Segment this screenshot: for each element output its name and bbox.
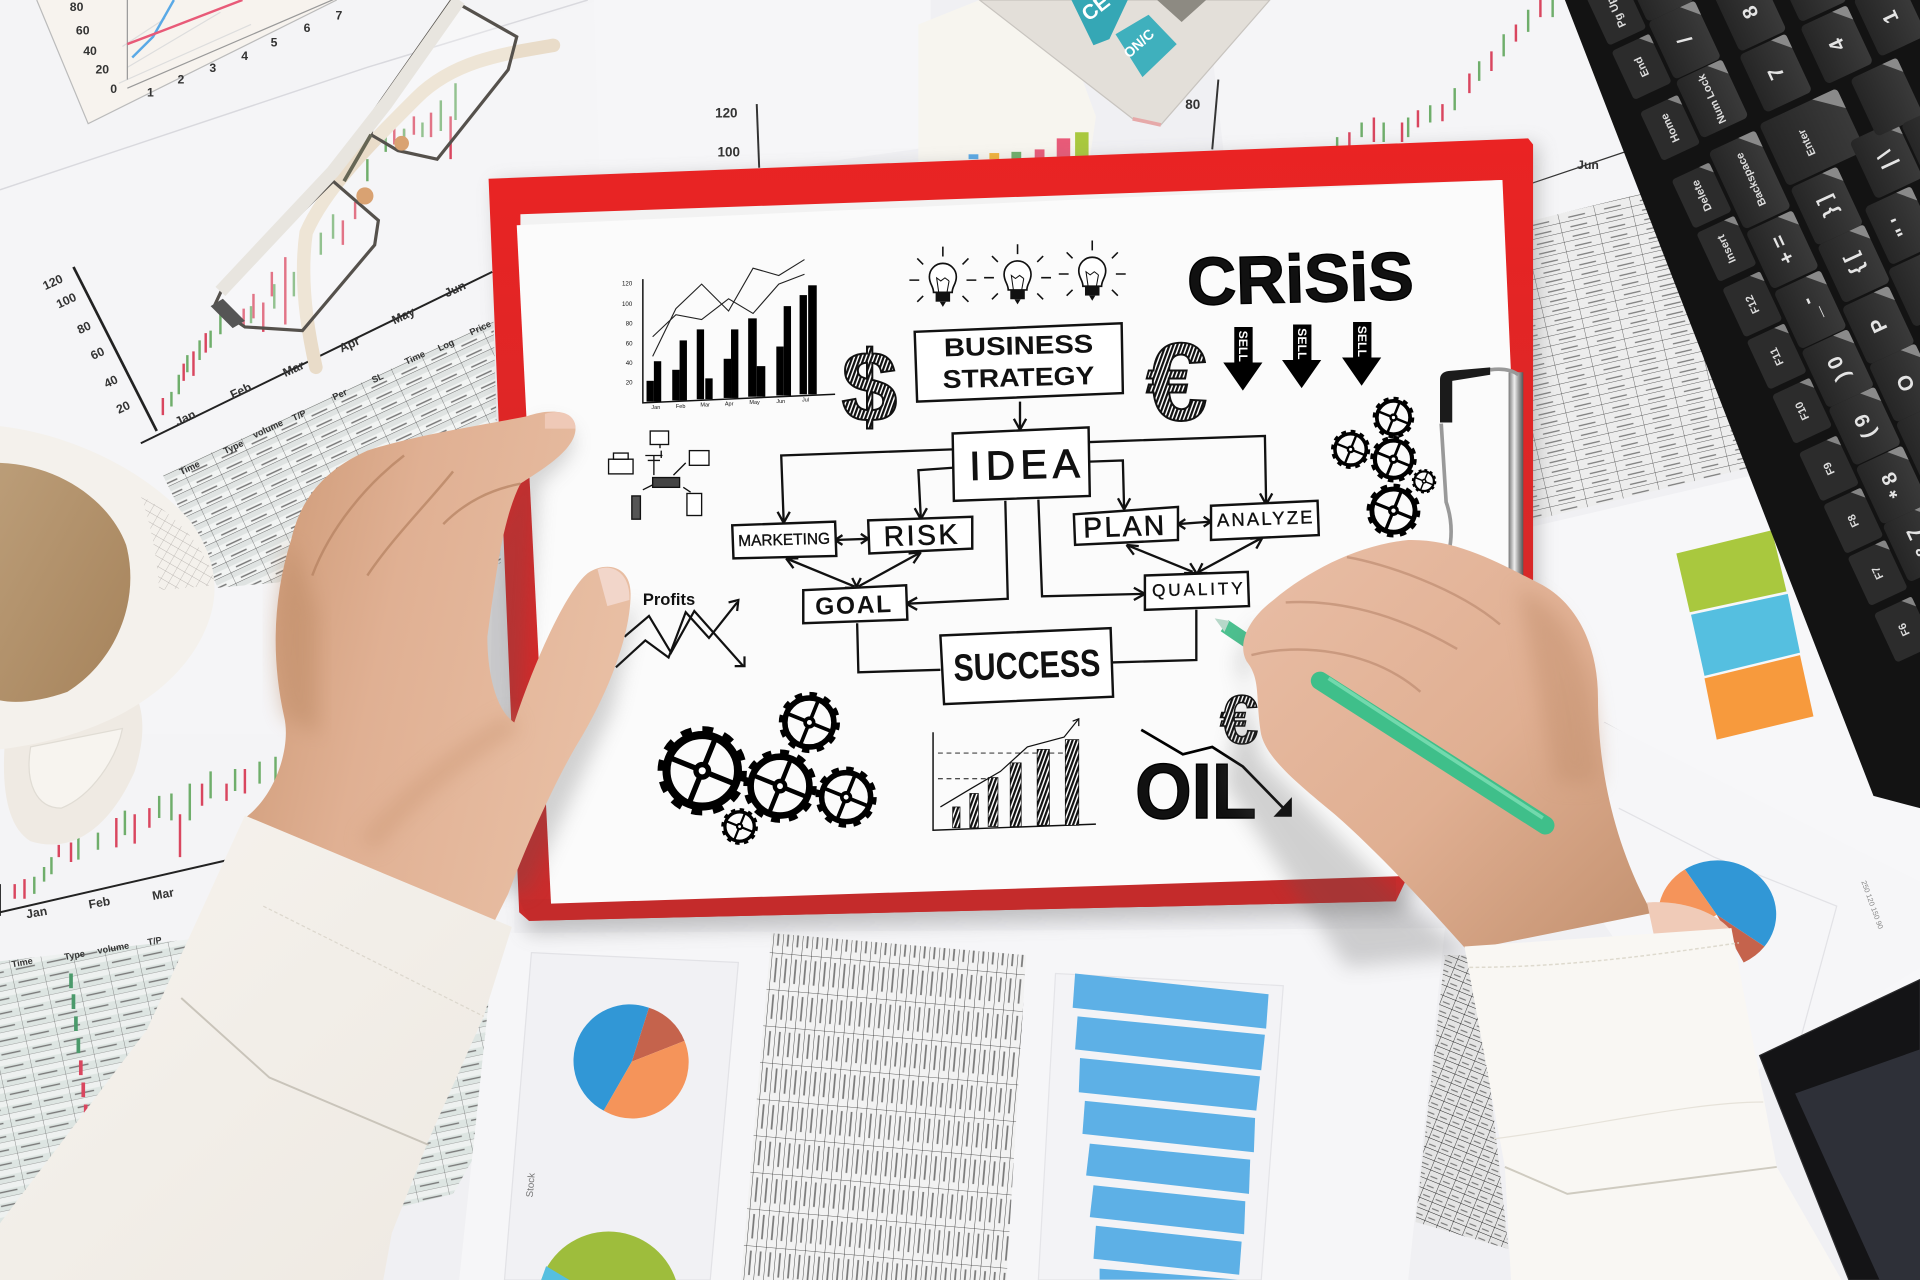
bottom table behind sleeve — [1416, 955, 1509, 1249]
paper: big candlestick sheet: 20 — [114, 398, 133, 417]
main key rows: _ - — [1795, 294, 1827, 326]
paper: top right candlestick: Jun — [1577, 158, 1599, 172]
box: idea — [953, 427, 1090, 501]
paper: top-left line chart: 1 — [147, 86, 154, 100]
data table upper left: Type — [222, 438, 245, 456]
main key rows: * 8 — [1877, 468, 1909, 501]
diagram: hand-drawn bar chart: May — [749, 400, 760, 406]
main key rows: { [ — [1840, 249, 1869, 278]
data table upper left: SL — [370, 371, 385, 385]
paper: top-left line chart: 20 — [96, 62, 109, 76]
right sleeve — [1464, 928, 1842, 1280]
main key rows: " ' — [1887, 211, 1916, 240]
box: risk — [868, 517, 972, 553]
main key rows: P — [1866, 314, 1892, 336]
data table upper left — [163, 319, 501, 588]
box: analyze: ANALYZE — [1217, 506, 1313, 531]
diagram: hand-drawn bar chart: Feb — [676, 404, 685, 410]
pie chart right — [1658, 860, 1776, 962]
data table lower left: volume — [97, 940, 130, 956]
box: idea: IDEA — [969, 440, 1080, 489]
box: business strategy — [915, 323, 1123, 402]
data table lower left: Time — [11, 956, 34, 969]
main key rows: O — [1892, 371, 1920, 395]
left sleeve — [0, 816, 512, 1280]
right hand — [1243, 540, 1736, 950]
key: CE — [1071, 0, 1128, 45]
profits graph — [616, 590, 744, 667]
profits graph: Profits — [643, 590, 695, 609]
clipboard shadow — [496, 144, 1538, 933]
diagram: hand-drawn bar chart: 100 — [622, 301, 633, 308]
candlestick sheet lower left: Mar — [151, 885, 175, 903]
paper: top-left line chart: 60 — [76, 23, 90, 37]
paper: big candlestick sheet: Feb — [228, 380, 254, 402]
key: ON/C — [1116, 15, 1177, 77]
stacked color blocks — [1676, 530, 1813, 740]
function key row: F11 — [1768, 345, 1787, 367]
paper: big candlestick sheet: 40 — [102, 372, 120, 391]
box: risk: RISK — [883, 519, 958, 552]
coffee mug — [0, 426, 216, 845]
main key rows: + = — [1766, 231, 1800, 268]
wide data table — [741, 933, 1026, 1280]
data table right — [1533, 192, 1769, 520]
box: success — [940, 628, 1113, 704]
paper: top middle chart: 120 — [715, 106, 738, 121]
main bottom sheet: Stock — [525, 1172, 538, 1198]
box: quality: QUALITY — [1152, 578, 1243, 600]
main bottom sheet — [459, 928, 1445, 1280]
function key row: F9 — [1821, 460, 1838, 477]
hand shadows — [367, 422, 1469, 967]
numeric keypad: 7 — [1764, 63, 1789, 83]
diagram: hand-drawn bar chart: Apr — [725, 401, 734, 407]
pen tip — [1215, 618, 1273, 659]
eyeglasses — [211, 0, 553, 367]
box: marketing: MARKETING — [738, 531, 830, 550]
pen barrel — [1320, 678, 1545, 825]
function key row: End — [1632, 55, 1652, 79]
network icon — [609, 431, 709, 519]
function key row: Delete — [1690, 178, 1715, 213]
numeric keypad: Num Lock — [1696, 71, 1729, 125]
temple arm curve — [304, 45, 553, 367]
data table upper left: Per — [331, 387, 349, 402]
red clipboard — [489, 138, 1533, 921]
paper: top-left line chart: 3 — [209, 61, 216, 75]
box: plan: PLAN — [1083, 510, 1165, 544]
box: business strategy: STRATEGY — [942, 362, 1095, 394]
diagram: hand-drawn bar chart: 40 — [626, 360, 633, 367]
function key row: F8 — [1846, 512, 1862, 529]
box: quality — [1145, 572, 1249, 610]
function key row — [1586, 0, 1920, 663]
blue bar chart — [1073, 973, 1269, 1280]
paper: right color chart sheet — [1533, 471, 1920, 1059]
diagram: hand-drawn bar chart: Jul — [802, 398, 809, 404]
paper: big candlestick sheet — [0, 0, 606, 857]
data table upper left: Log — [436, 337, 456, 353]
main key rows: ( 9 — [1850, 410, 1881, 442]
sheet on clipboard — [517, 180, 1533, 904]
diagram: hand-drawn bar chart: 120 — [622, 280, 633, 287]
paper: top-left line chart: 6 — [304, 21, 311, 35]
data table upper left: Time — [178, 459, 201, 477]
diagram: hand-drawn bar chart — [622, 260, 835, 411]
paper: top middle chart — [594, 0, 931, 184]
data table lower left: T/P — [147, 935, 163, 947]
box: success: SUCCESS — [953, 643, 1101, 690]
calculator — [980, 0, 1270, 125]
paper: big candlestick sheet: 100 — [54, 290, 79, 311]
numeric keypad — [1621, 0, 1920, 142]
diagram: hand-drawn bar chart: Jan — [651, 405, 660, 411]
diagram: light bulbs — [909, 241, 1126, 307]
paper: top-left line chart: 0 — [110, 82, 117, 96]
keyboard — [1565, 0, 1920, 808]
heading: CRISIS: CRiSiS — [1186, 239, 1415, 320]
paper: top middle chart: 100 — [718, 145, 740, 160]
paper: big candlestick sheet: 80 — [75, 318, 93, 337]
paper: top-left line chart: 40 — [83, 44, 97, 58]
candlestick sheet lower left — [0, 735, 514, 980]
paper: big candlestick sheet: 60 — [88, 344, 107, 363]
candlestick sheet lower left: Feb — [87, 894, 111, 912]
box: goal: GOAL — [815, 591, 892, 621]
paper: top right candlestick: 80 — [1185, 97, 1200, 112]
function key row: F12 — [1744, 293, 1762, 315]
paper: big candlestick sheet: May — [390, 304, 417, 327]
sell arrows: SELL — [1236, 331, 1250, 362]
paper: big candlestick sheet: Apr — [337, 334, 362, 355]
data table lower left: Type — [64, 949, 86, 962]
connectors — [778, 402, 1272, 672]
paper: top-left line chart: 5 — [271, 36, 278, 50]
key: ON/C: ON/C — [1120, 26, 1157, 61]
gears cluster right — [1331, 397, 1436, 537]
gears cluster bottom — [658, 692, 876, 845]
main key rows — [1706, 46, 1920, 583]
paper: top-left line chart: 2 — [178, 72, 185, 86]
main key rows: Enter — [1796, 126, 1819, 158]
data table lower left — [0, 904, 496, 1261]
data table upper left: Time — [403, 349, 427, 367]
numeric keypad: 4 — [1824, 34, 1850, 55]
data table upper left: Price — [468, 319, 493, 337]
paper: top right candlestick — [1185, 0, 1714, 294]
function key row: F6 — [1896, 621, 1913, 638]
box: analyze — [1211, 501, 1319, 540]
diagram: hand-drawn bar chart: 20 — [626, 379, 633, 386]
main key rows: Backspace — [1734, 151, 1769, 208]
green pie chart — [541, 1232, 676, 1280]
diagram: hand-drawn bar chart: 60 — [626, 340, 633, 347]
tablet — [1760, 980, 1920, 1280]
sell arrows: SELL — [1355, 326, 1369, 358]
paper: big candlestick sheet: Mar — [281, 358, 307, 380]
diagram: hand-drawn bar chart: 80 — [626, 321, 633, 328]
metal clip — [1440, 367, 1523, 605]
diagram: hand-drawn bar chart: Mar — [700, 403, 710, 409]
paper: top-left line chart: 80 — [70, 0, 84, 14]
lower lens — [214, 181, 378, 331]
heading: OIL with falling arrow: OIL — [1135, 747, 1256, 835]
sell arrows: SELL — [1295, 328, 1309, 360]
paper: lower right pie sheet: 250 120 150 90 — [1859, 879, 1885, 930]
dollar sign: $ — [841, 331, 897, 443]
diagram: hand-drawn bar chart: Jun — [776, 399, 785, 405]
numeric keypad: 8 — [1738, 2, 1764, 22]
paper: big candlestick sheet: 120 — [41, 272, 65, 293]
heading: OIL with falling arrow — [1135, 730, 1292, 835]
main key rows: | \ — [1873, 146, 1901, 172]
main key rows: ) 0 — [1823, 352, 1854, 384]
left hand — [245, 412, 631, 931]
paper: top-left line chart: 4 — [241, 49, 248, 63]
paper: top-left line chart — [0, 0, 606, 190]
small euro under hand: € — [1220, 681, 1258, 758]
box: goal — [803, 585, 907, 623]
numeric keypad: / — [1674, 32, 1697, 47]
data table upper left: T/P — [290, 408, 308, 423]
paper: lower right pie sheet — [1592, 722, 1920, 1102]
sell arrows — [1223, 322, 1381, 391]
flowchart — [732, 323, 1319, 704]
function key row: Insert — [1715, 232, 1739, 265]
paper: big candlestick sheet: Jan — [173, 407, 198, 429]
function key row: F7 — [1870, 564, 1886, 581]
function key row: Home — [1659, 111, 1683, 144]
pie chart bottom — [573, 1004, 689, 1118]
numeric keypad: 1 — [1878, 7, 1904, 27]
box: business strategy: BUSINESS — [944, 330, 1094, 362]
box: marketing — [732, 522, 836, 558]
paper: top-left line chart: 7 — [336, 9, 343, 23]
main key rows: } ] — [1813, 192, 1842, 220]
upper lens — [371, 0, 517, 159]
small colored bar chart — [918, 0, 1096, 165]
function key row: F10 — [1793, 400, 1812, 422]
candlestick sheet lower left: Jan — [25, 904, 48, 921]
data table upper left: volume — [251, 418, 285, 440]
hatched growth chart — [933, 719, 1096, 830]
euro sign: € — [1146, 321, 1207, 444]
paper: big candlestick sheet: Jun — [442, 278, 468, 300]
